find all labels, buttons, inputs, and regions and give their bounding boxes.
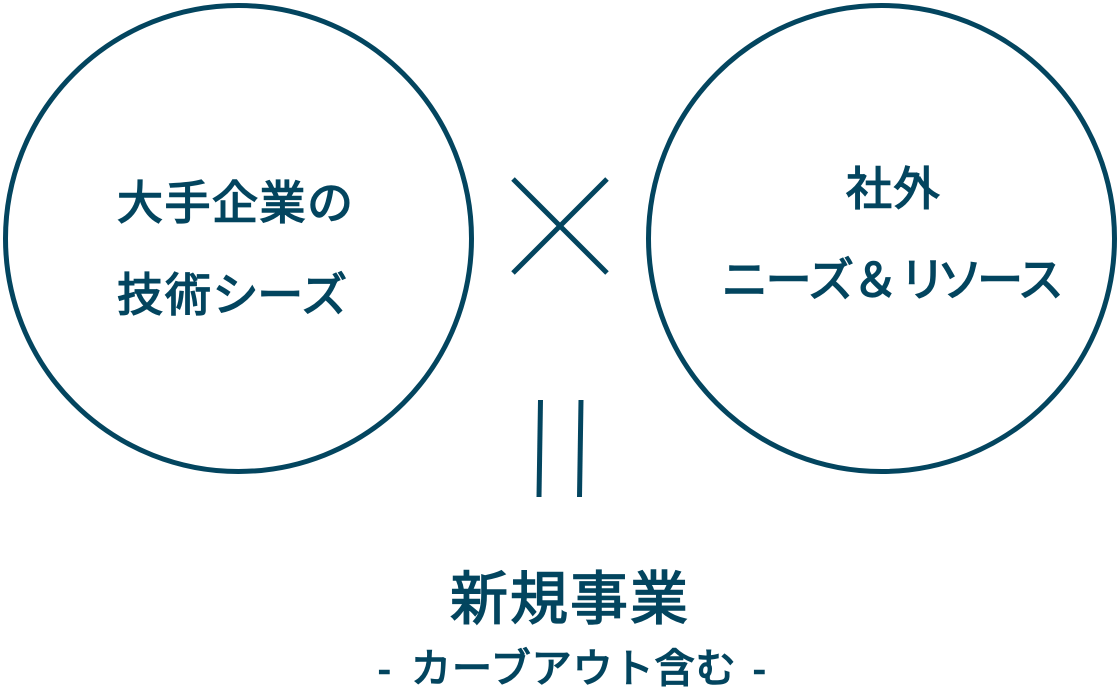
left circle: in-house technology seeds: 技術シーズ — [117, 269, 347, 321]
equals sign — [539, 400, 581, 497]
right circle: external needs and resources: ニーズ＆リソース — [723, 254, 1061, 306]
left circle: in-house technology seeds — [6, 6, 472, 472]
result subtext: - — [378, 649, 391, 691]
result heading: 新規事業 — [450, 567, 690, 632]
multiplication sign — [513, 179, 607, 273]
right circle: external needs and resources: 社外 — [846, 163, 941, 215]
result subtext: - — [753, 649, 766, 691]
right circle: external needs and resources — [648, 6, 1114, 472]
left circle: in-house technology seeds: 大手企業の — [117, 177, 354, 229]
result subtext: カーブアウト含む — [411, 647, 737, 691]
